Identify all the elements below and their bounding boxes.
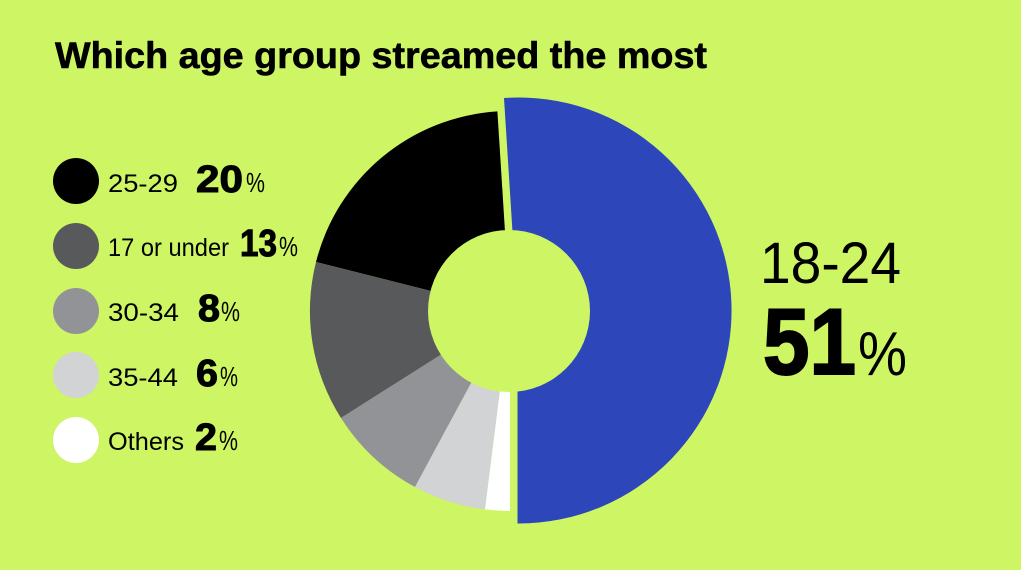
legend <box>53 158 298 463</box>
callout: 18-24 51%: % <box>858 320 907 389</box>
title: Which age group streamed the most <box>55 35 707 76</box>
legend item: 17 or under: % <box>279 231 298 262</box>
callout: 18-24 51%: 51 <box>763 289 856 394</box>
legend item: 35-44: % <box>220 361 238 392</box>
slice: 30-34 8% <box>341 311 510 487</box>
legend item: 17 or under: 17 or under <box>108 234 229 262</box>
slice: 17 or under 13% <box>310 262 510 418</box>
legend item: Others: 2 <box>195 417 217 459</box>
slice: 25-29 20% <box>316 111 510 311</box>
legend item: 35-44: 35-44 <box>108 364 178 392</box>
callout: 18-24 51% <box>760 231 907 394</box>
legend item: 35-44: 6 <box>196 353 218 395</box>
legend item: 30-34: % <box>221 296 240 327</box>
legend item: 30-34 <box>53 288 240 334</box>
legend item: 25-29: % <box>246 167 265 198</box>
callout: 18-24 51%: 18-24 <box>760 231 901 296</box>
legend item: Others: % <box>219 425 238 456</box>
slice: Others 2% <box>485 311 510 511</box>
legend item: 25-29: 20 <box>196 159 243 201</box>
legend item: 17 or under: 13 <box>240 223 277 265</box>
slice: 35-44 6% <box>415 311 510 509</box>
legend item: 35-44 <box>53 352 238 398</box>
legend item: 25-29: 25-29 <box>108 170 178 198</box>
slice: 18-24 51% <box>504 98 732 524</box>
legend item: 17 or under <box>53 223 298 269</box>
donut hole <box>428 230 590 392</box>
legend item: 30-34: 30-34 <box>108 299 179 327</box>
donut chart <box>310 98 732 524</box>
legend item: Others <box>53 417 238 463</box>
legend item: 30-34: 8 <box>198 288 220 330</box>
legend item: 25-29 <box>53 158 265 204</box>
legend item: Others: Others <box>108 428 184 456</box>
